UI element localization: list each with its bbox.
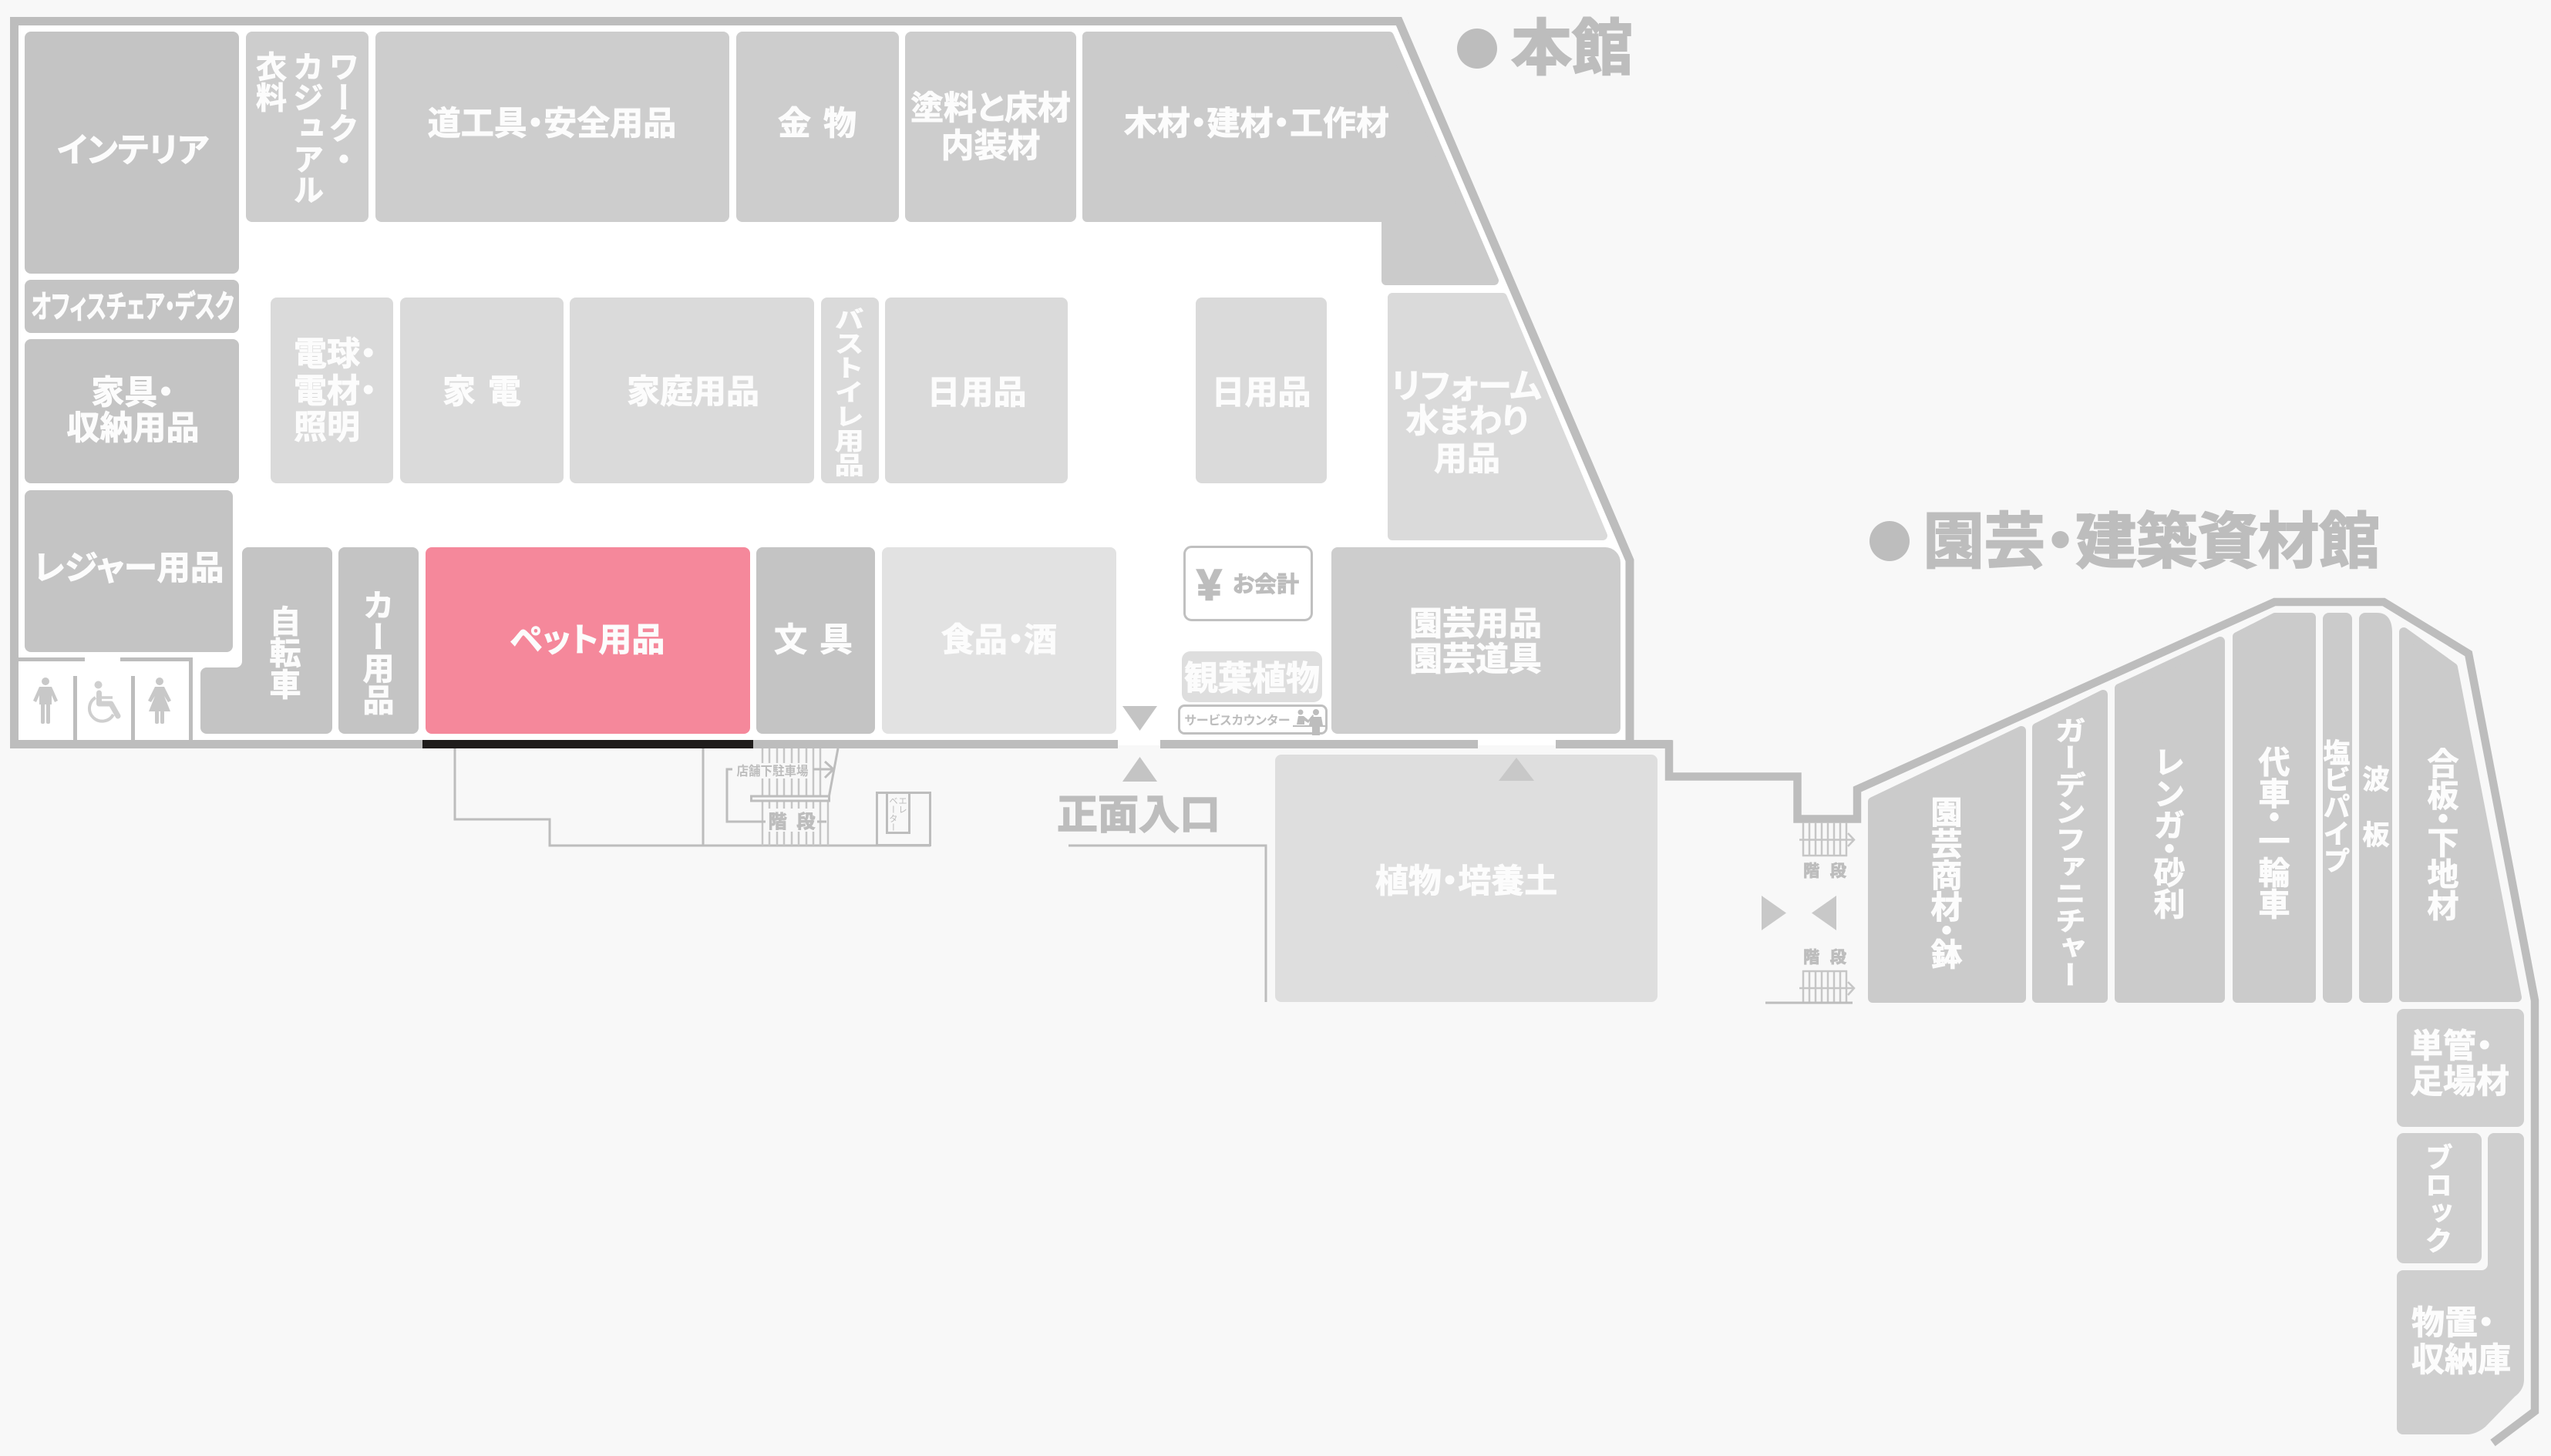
panel: lumber and building materials: 木材・建材・工作材 <box>1124 106 1389 143</box>
panel: loaner carts and wheelbarrows: 代車 ・ 一輪車 <box>2253 745 2290 920</box>
panel: bicycles <box>200 547 332 734</box>
main building floor <box>15 22 1630 745</box>
panel: sheds and storage <box>2397 1133 2524 1434</box>
arrow: entrance down <box>1122 706 1157 731</box>
panel: leisure goods <box>25 490 233 652</box>
panel: stationery: 文 具 <box>774 622 853 659</box>
panel: foliage plants: 観葉植物 <box>1184 660 1320 698</box>
panel: renovation and plumbing: リフォーム <box>1392 368 1541 405</box>
panel: renovation and plumbing: 水まわり <box>1406 403 1528 440</box>
heading: garden and building materials hall: 園芸・建築資材館 <box>1923 507 2380 576</box>
service counter sign: サービスカウンター <box>1184 713 1291 728</box>
panel: PVC pipe <box>2319 613 2352 1003</box>
panel: paint and flooring: 塗料と床材 <box>910 90 1071 127</box>
staircase to store parking <box>727 748 838 846</box>
panel: tools and safety goods: 道工具・安全用品 <box>428 106 676 143</box>
panel: pet goods (highlighted) <box>426 547 750 734</box>
panel: lumber and building materials <box>1087 36 1494 281</box>
arrow: left-pointing entrance <box>1812 896 1836 930</box>
panel: leisure goods: レジャー用品 <box>34 550 224 587</box>
garden building outer wall <box>1619 602 2535 1443</box>
panel: PVC pipe: 塩ビパイプ <box>2319 738 2350 874</box>
panel: daily goods right: 日用品 <box>1212 375 1311 412</box>
checkout sign <box>1184 547 1312 620</box>
panel: home appliances: 家 電 <box>443 374 521 411</box>
panel: work and casual clothing: カジュアル <box>288 51 322 205</box>
panel: light bulbs and electrical <box>271 298 393 483</box>
panel: pet goods (highlighted): ペット用品 <box>510 622 665 659</box>
panel: single pipe and scaffolding: 単管・ <box>2410 1028 2493 1065</box>
checkout sign: お会計 <box>1233 572 1299 597</box>
arrow: entrance up <box>1122 757 1157 782</box>
stairs lower right: 階 段 <box>1803 949 1846 967</box>
panel: gardening materials and pots <box>1873 731 2021 998</box>
panel: gardening goods and tools: 園芸用品 <box>1409 606 1542 643</box>
panel: corrugated sheet: 板 <box>2359 820 2389 848</box>
panel: renovation and plumbing: 用品 <box>1434 441 1500 478</box>
panel: work and casual clothing <box>246 32 369 222</box>
panel: office chair and desk: オフィスチェア・デスク <box>31 289 234 324</box>
panel: light bulbs and electrical: 電球・ <box>294 336 376 373</box>
panel: single pipe and scaffolding: 足場材 <box>2410 1064 2509 1101</box>
panel: bath and toilet goods <box>821 298 879 483</box>
panel: work and casual clothing: ワーク・ <box>324 51 358 174</box>
panel: garden furniture: ガーデンファニチャー <box>2051 717 2085 988</box>
panel: furniture and storage <box>25 339 239 483</box>
panel: stationery <box>756 547 875 734</box>
main building outer wall <box>10 22 1672 748</box>
panel: bicycles: 自転車 <box>264 605 301 700</box>
panel: daily goods left: 日用品 <box>927 375 1027 412</box>
panel: light bulbs and electrical: 照明 <box>294 409 360 446</box>
panel: hardware: 金 物 <box>778 106 857 143</box>
panel: single pipe and scaffolding <box>2397 1009 2524 1127</box>
panel: plywood and base materials <box>2404 632 2517 997</box>
panel: car goods: カー用品 <box>358 589 395 715</box>
panel: household goods: 家庭用品 <box>627 374 759 411</box>
panel: light bulbs and electrical: 電材・ <box>294 373 376 410</box>
panel: household goods <box>570 298 814 483</box>
panel: sheds and storage: 物置・ <box>2411 1305 2495 1342</box>
checkout sign: ¥ <box>1197 560 1221 609</box>
stairs upper right <box>1799 822 1854 880</box>
panel: plywood and base materials: 合板 ・ 下地材 <box>2422 747 2459 921</box>
panel: home appliances <box>400 298 564 483</box>
panel: food and liquor: 食品・酒 <box>941 622 1057 659</box>
elevator: ベーター <box>888 796 898 832</box>
panel: gardening materials and pots: 園芸商材 ・ 鉢 <box>1926 795 1963 970</box>
panel: work and casual clothing: 衣料 <box>251 51 287 113</box>
heading: main building: 本館 <box>1511 14 1633 82</box>
elevator: エレ <box>897 796 907 814</box>
panel: plants and potting soil: 植物・培養土 <box>1375 863 1557 900</box>
panel: loaner carts and wheelbarrows <box>2237 617 2311 998</box>
icon: accessible restroom <box>89 681 118 721</box>
panel: sheds and storage: 収納庫 <box>2411 1342 2511 1379</box>
panel: bricks and gravel: レンガ ・ 砂利 <box>2149 745 2185 920</box>
entrance lower boundary line <box>1069 846 1266 1002</box>
staircase to store parking: 階 段 <box>769 812 815 832</box>
icon: women's restroom <box>148 678 171 724</box>
staircase to store parking: 店舗下駐車場 <box>737 763 808 778</box>
panel: renovation and plumbing <box>1392 298 1603 536</box>
panel: gardening goods and tools <box>1331 547 1620 734</box>
panel: furniture and storage: 家具・ <box>91 375 174 412</box>
heading: main building <box>1457 14 1633 82</box>
panel: corrugated sheet: 波 <box>2359 765 2389 792</box>
elevator <box>877 792 930 845</box>
panel: paint and flooring: 内装材 <box>941 128 1041 165</box>
panel: gardening goods and tools: 園芸道具 <box>1409 641 1542 678</box>
pet section street-side highlight bar <box>422 740 753 748</box>
panel: blocks <box>2397 1133 2482 1263</box>
panel: paint and flooring <box>905 32 1076 222</box>
panel: tools and safety goods <box>375 32 729 222</box>
panel: blocks: ブロック <box>2421 1143 2453 1254</box>
stairs lower right <box>1765 949 1854 1003</box>
panel: daily goods right <box>1196 298 1327 483</box>
divider line to parking <box>702 748 705 846</box>
arrow: plants entrance up <box>1499 758 1534 781</box>
panel: bricks and gravel <box>2119 641 2220 998</box>
panel: interior: インテリア <box>57 133 209 170</box>
service counter sign <box>1180 706 1326 735</box>
panel: office chair and desk <box>25 280 239 333</box>
panel: bath and toilet goods: バストイレ用品 <box>831 307 864 476</box>
label: main entrance: 正面入口 <box>1057 792 1220 838</box>
panel: hardware <box>736 32 899 222</box>
pet area building outline <box>455 748 931 846</box>
icon: men's restroom <box>33 678 58 724</box>
panel: daily goods left <box>885 298 1068 483</box>
panel: food and liquor <box>882 547 1116 734</box>
panel: garden furniture <box>2037 694 2103 998</box>
panel: plants and potting soil <box>1275 755 1657 1002</box>
panel: car goods <box>338 547 419 734</box>
stairs upper right: 階 段 <box>1803 863 1846 880</box>
restroom walls <box>19 657 193 740</box>
arrow: right-pointing entrance <box>1762 896 1786 930</box>
panel: corrugated sheet <box>2359 613 2392 1003</box>
panel: furniture and storage: 収納用品 <box>66 410 199 447</box>
panel: interior <box>25 32 239 274</box>
